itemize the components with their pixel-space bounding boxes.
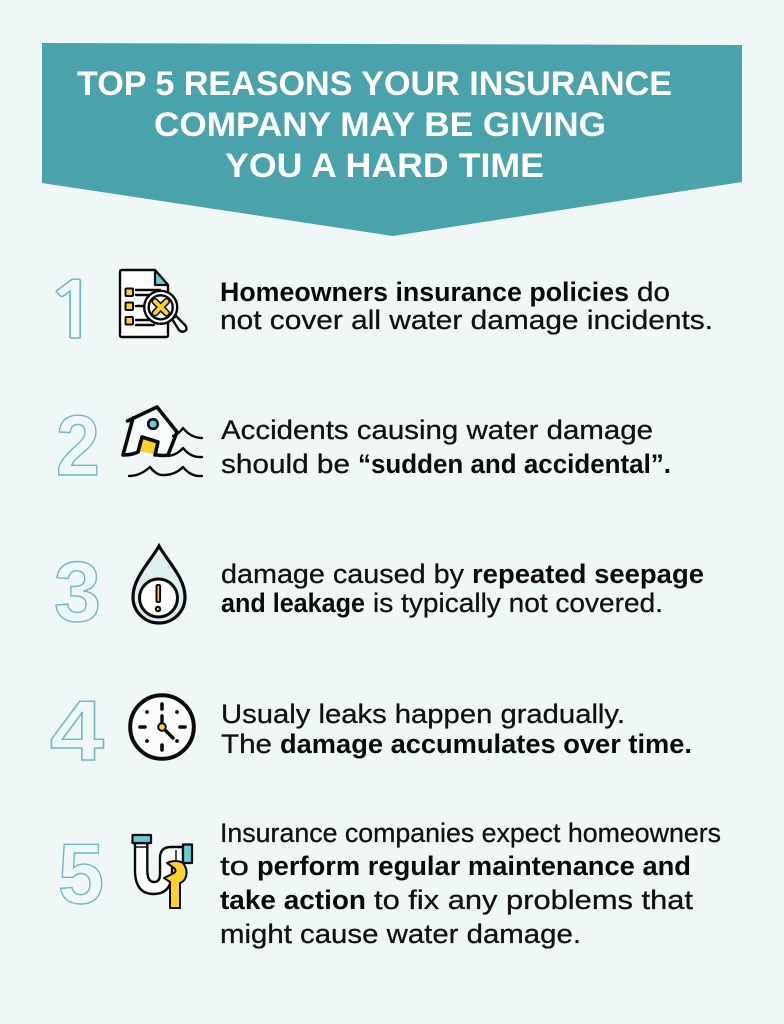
number 3: 3 — [54, 545, 101, 640]
reason 4 — [50, 684, 692, 779]
reason 3 — [54, 545, 704, 640]
number 1: 1 — [44, 274, 102, 350]
title: COMPANY MAY BE GIVING — [154, 106, 606, 144]
text 2: “sudden and accidental”. — [358, 449, 671, 479]
number 2: 2 — [56, 399, 100, 494]
title: TOP 5 REASONS YOUR INSURANCE — [77, 65, 672, 103]
text 5 — [220, 818, 721, 949]
icon: clock — [130, 695, 194, 759]
reason 2 — [56, 399, 671, 494]
text 1 — [220, 277, 713, 335]
icon: flooded house — [123, 407, 202, 476]
number 5: 5 — [58, 827, 104, 922]
text 2: Accidents causing water damage — [221, 415, 653, 445]
text 4: The — [221, 729, 272, 759]
reason 5 — [58, 818, 721, 949]
text 3: repeated seepage — [472, 559, 704, 589]
text 1: do — [637, 277, 670, 307]
icon: water drop with alert — [133, 546, 185, 623]
icon: pipe and wrench — [132, 835, 192, 908]
text 5: take action — [220, 885, 366, 915]
title — [77, 65, 672, 185]
title: YOU A HARD TIME — [225, 147, 544, 185]
text 5: might cause water damage. — [220, 919, 581, 949]
text 1: Homeowners insurance policies — [220, 277, 629, 307]
text 4 — [221, 699, 692, 759]
text 5: perform regular maintenance and — [257, 851, 691, 881]
text 5: to — [220, 851, 249, 881]
icon: document with magnifier — [120, 270, 186, 337]
text 3: damage caused by — [221, 559, 465, 589]
text 5: to fix any problems that — [374, 885, 694, 915]
title banner — [42, 43, 742, 236]
text 3: and leakage — [221, 588, 365, 618]
text 4: damage accumulates over time. — [280, 729, 692, 759]
text 5: Insurance companies expect homeowners — [220, 818, 721, 848]
text 2 — [221, 415, 671, 479]
number 4: 4 — [50, 684, 104, 779]
text 2: should be — [221, 449, 350, 479]
reason 1 — [44, 270, 713, 350]
text 3: is typically not covered. — [373, 588, 663, 618]
text 1: not cover all water damage incidents. — [220, 305, 713, 335]
text 4: Usualy leaks happen gradually. — [221, 699, 625, 729]
text 3 — [221, 559, 704, 618]
